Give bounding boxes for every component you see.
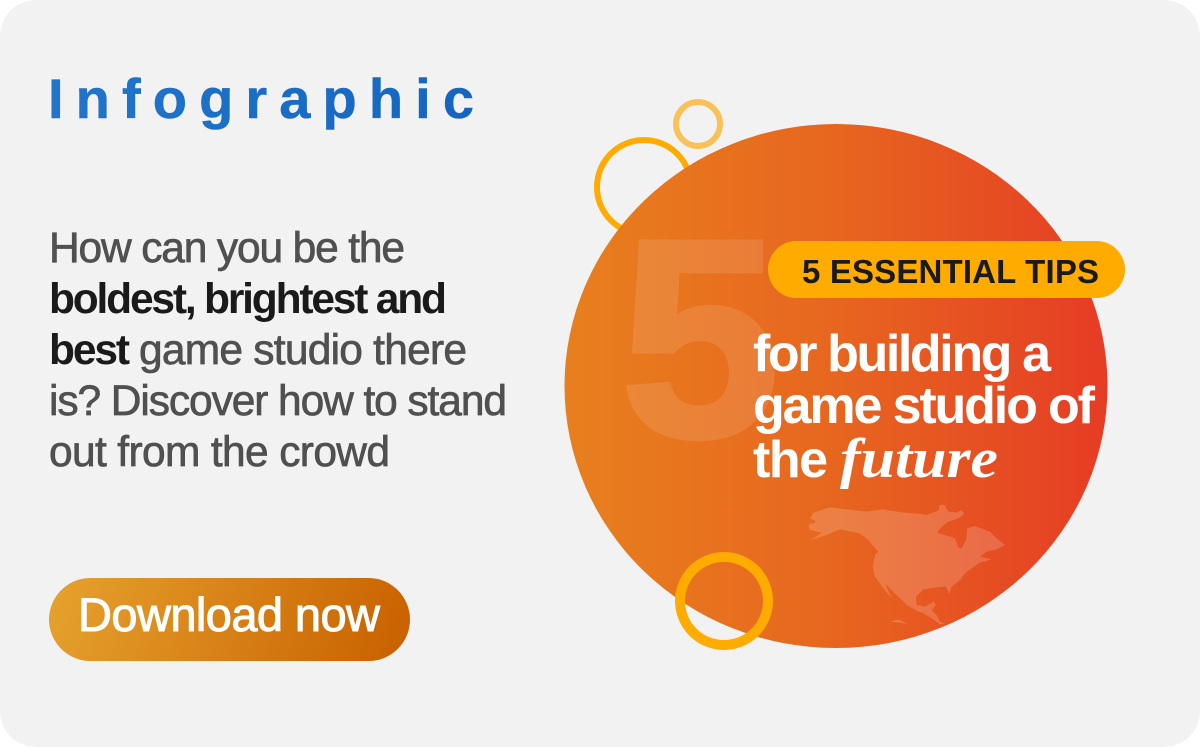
intro text block: is? Discover how to stand [49,378,507,425]
tips badge [768,241,1125,298]
panel title: for building a [753,325,1052,383]
intro text block [49,225,507,476]
panel title: game studio of [753,377,1096,435]
tips badge: 5 ESSENTIAL TIPS [802,253,1099,290]
download button: Download now [78,588,381,641]
icon: North America map [808,505,1005,624]
panel title [753,325,1096,490]
decorative small ring [676,102,720,146]
orange circle panel [564,124,1108,648]
intro text block: How can you be the [49,225,405,272]
intro text block: out from the crowd [49,429,390,476]
decorative bottom ring [680,557,768,645]
panel title: future [840,428,998,490]
panel title: the [753,431,828,489]
large faded number 5: 5 [620,181,780,496]
intro text block: game studio there [139,327,467,374]
intro text block: boldest, brightest and [49,276,447,323]
heading: Infographic [48,67,474,130]
download button [49,578,410,661]
intro text block: best [49,327,130,374]
decorative large ring [597,140,691,234]
